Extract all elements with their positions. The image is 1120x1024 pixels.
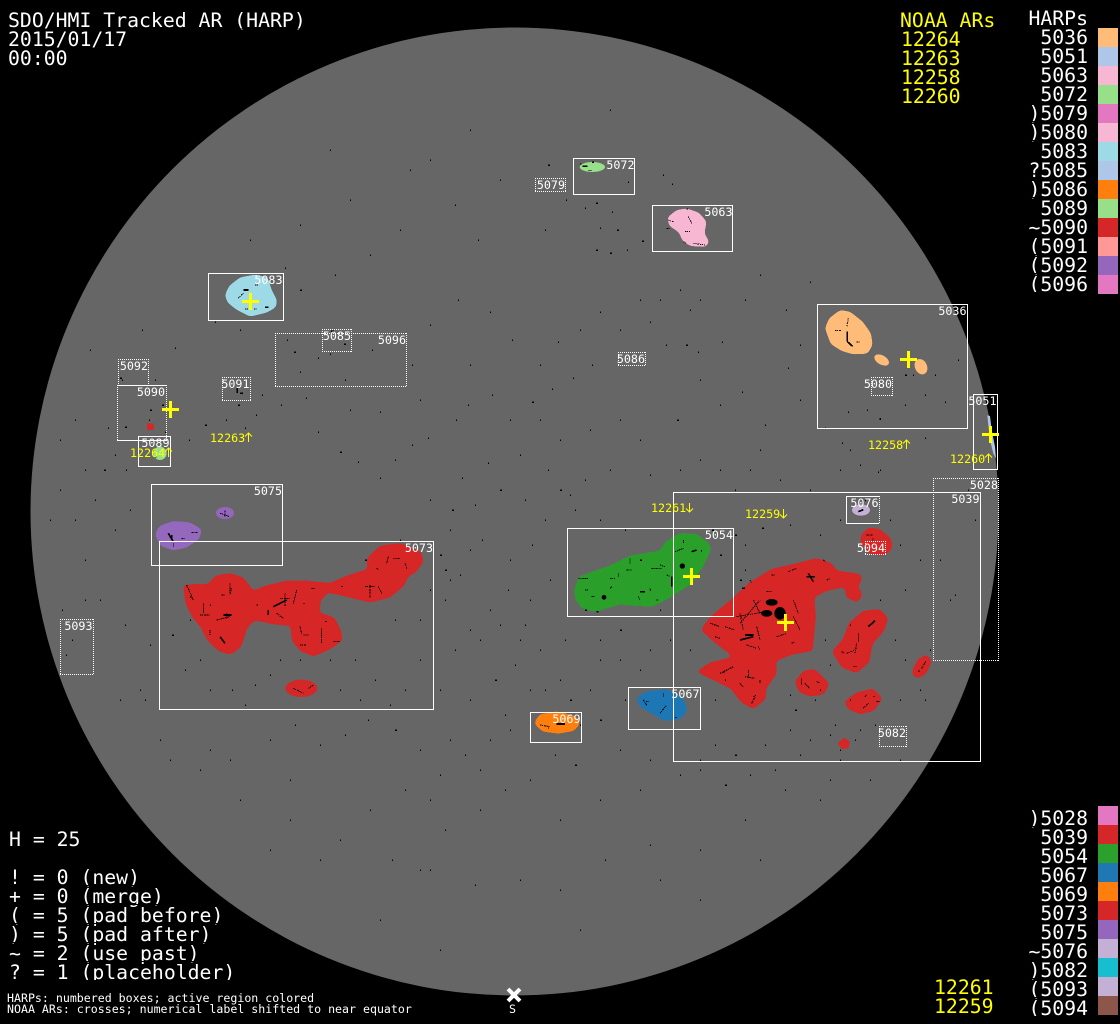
title block: 00:00 (8, 47, 68, 70)
active region: HARP 5054 (574, 533, 711, 612)
HARP list, bottom: 5073 (1040, 902, 1088, 925)
HARP 5054 box and label (568, 528, 734, 616)
active region: HARP 5089 (153, 447, 167, 460)
H count and status legend: ~ = 2 (use past) (9, 942, 200, 965)
HARP list, top: 5051 (1040, 45, 1088, 68)
HARP 5036 box and label: 5036 (938, 304, 966, 318)
H count and status legend: ! = 0 (new) (9, 866, 140, 889)
HARP 5073 box and label: 5073 (405, 541, 433, 555)
HARP list, bottom: 5039 (1040, 826, 1088, 849)
HARP 5072 box and label (574, 158, 634, 194)
NOAA label 12261: 12261 (651, 501, 686, 515)
title block (9, 12, 302, 66)
HARP list, bottom: )5028 (1028, 807, 1088, 830)
HARP list, bottom: 5054 (1040, 845, 1088, 868)
NOAA label 12260: 12260 (950, 452, 985, 466)
active region: HARP 5075 (155, 507, 234, 550)
HARP 5051 box and label (968, 394, 998, 470)
HARP 5083 box and label (208, 273, 284, 320)
NOAA AR list, bottom: 12261 (934, 976, 994, 999)
HARP list, top: 5036 (1040, 26, 1088, 49)
footnote (7, 991, 412, 1016)
H count and status legend: H = 25 (9, 828, 80, 851)
footnote: NOAA ARs: crosses; numerical label shifted to near equator (7, 1002, 412, 1016)
HARP list, top: ?5085 (1028, 159, 1088, 182)
HARP list, top: 5072 (1040, 83, 1088, 106)
HARP 5054 box and label: 5054 (705, 528, 733, 542)
HARP 5067 box and label: 5067 (671, 687, 700, 701)
HARP 5028 dotted box and label: 5028 (970, 478, 998, 492)
NOAA AR list, top: 12263 (901, 47, 961, 70)
south label: S (509, 1002, 516, 1016)
HARP 5080 dotted box and label: 5080 (864, 377, 892, 391)
HARP list, top: HARPs (1028, 7, 1088, 30)
HARP 5067 box and label (628, 687, 700, 730)
colour swatches, top (1098, 28, 1118, 294)
HARP 5096 dotted box and label (275, 333, 407, 387)
HARP list, bottom: (5093 (1028, 978, 1088, 1001)
HARP 5090 box and label (117, 385, 167, 441)
H count and status legend: ( = 5 (pad before) (9, 904, 223, 927)
HARP 5090 box and label: 5090 (137, 385, 165, 399)
south pole marker (508, 989, 520, 1001)
sunspots and magnetic specks (50, 110, 976, 950)
HARP list, top: 5063 (1040, 64, 1088, 87)
title block: SDO/HMI Tracked AR (HARP) (8, 9, 306, 32)
NOAA AR list, top: NOAA ARs (900, 9, 995, 32)
HARP 5076 box and label (846, 496, 880, 524)
NOAA AR list, top: 12264 (901, 28, 961, 51)
active region: HARP 5036 (825, 310, 930, 376)
HARP list, top: 5089 (1040, 197, 1088, 220)
NOAA AR list, bottom: 12259 (934, 995, 994, 1018)
HARP 5086 dotted box and label: 5086 (617, 352, 645, 366)
active region: HARP 5076 (852, 504, 870, 516)
HARP 5072 box and label: 5072 (606, 158, 634, 172)
HARP list, bottom (1028, 807, 1088, 1020)
NOAA label 12263: 12263 (210, 431, 245, 445)
HARP 5069 box and label (530, 712, 582, 742)
active region: HARP 5072 (580, 162, 605, 172)
NOAA label 12258: 12258 (868, 438, 903, 452)
HARP 5096 dotted box and label: 5096 (378, 333, 406, 347)
HARP 5091 dotted box and label: 5091 (221, 377, 250, 391)
HARP list, bottom: 5075 (1040, 921, 1088, 944)
HARP list, bottom: (5094 (1028, 997, 1088, 1020)
NOAA AR list, top: 12258 (901, 66, 961, 89)
HARP 5075 box and label (152, 484, 282, 566)
active region: HARP 5083 (225, 275, 277, 317)
active region: HARP 5063 (667, 208, 709, 247)
HARP 5089 box and label (138, 436, 170, 466)
HARP list, top (1028, 7, 1088, 296)
H count and status legend: ? = 1 (placeholder) (9, 961, 235, 984)
HARP 5093 dotted box and label: 5093 (64, 619, 92, 633)
HARP list, bottom: 5067 (1040, 864, 1088, 887)
H count and status legend: + = 0 (merge) (9, 885, 164, 908)
NOAA AR list, top (900, 9, 995, 108)
HARP 5085 dotted box and label (322, 329, 352, 352)
NOAA AR list, bottom (934, 976, 994, 1018)
NOAA AR list, top: 12260 (901, 85, 961, 108)
H count and status legend: ) = 5 (pad after) (9, 923, 211, 946)
HARP 5076 box and label: 5076 (850, 496, 878, 510)
HARP list, top: ~5090 (1028, 216, 1088, 239)
HARP list, bottom: 5069 (1040, 883, 1088, 906)
H count and status legend (9, 828, 235, 984)
HARP 5075 box and label: 5075 (254, 484, 282, 498)
HARP list, bottom: )5082 (1028, 959, 1088, 982)
HARP 5093 dotted box and label (60, 619, 94, 675)
HARP 5063 box and label: 5063 (704, 205, 732, 219)
HARP 5094 dotted box and label: 5094 (857, 541, 885, 555)
HARP 5051 box and label: 5051 (968, 394, 996, 408)
active region: HARP 5090 (147, 423, 154, 430)
HARP list, top: )5079 (1028, 102, 1088, 125)
HARP 5092 dotted box and label: 5092 (120, 359, 148, 373)
HARP list, bottom: ~5076 (1028, 940, 1088, 963)
HARP 5036 box and label (818, 304, 968, 428)
HARP 5083 box and label: 5083 (254, 273, 282, 287)
NOAA label 12264: 12264 (130, 446, 165, 460)
HARP 5082 dotted box and label (878, 726, 907, 747)
active region: HARP 5069 (534, 711, 580, 734)
active region: HARP 5067 (636, 689, 688, 721)
active region: HARP 5073 (183, 543, 424, 697)
title block: 2015/01/17 (8, 28, 127, 51)
HARP 5028 dotted box and label (933, 478, 999, 661)
HARP 5089 box and label: 5089 (141, 436, 170, 450)
NOAA label 12259: 12259 (745, 507, 780, 521)
NOAA crosses (162, 293, 999, 631)
HARP 5092 dotted box and label (118, 359, 149, 385)
colour swatches, bottom (1098, 806, 1118, 1015)
HARP list, top: (5091 (1028, 235, 1088, 258)
footnote: HARPs: numbered boxes; active region colored (7, 991, 314, 1005)
active region: HARP 5051 (987, 415, 996, 458)
HARP 5069 box and label: 5069 (552, 712, 580, 726)
HARP list, top: (5092 (1028, 254, 1088, 277)
HARP list, top: )5086 (1028, 178, 1088, 201)
HARP 5039 box and label: 5039 (951, 492, 980, 506)
HARP list, top: )5080 (1028, 121, 1088, 144)
HARP 5073 box and label (160, 541, 434, 710)
HARP 5082 dotted box and label: 5082 (878, 726, 906, 740)
HARP list, top: 5083 (1040, 140, 1088, 163)
HARP 5039 box and label (674, 492, 980, 762)
HARP list, top: (5096 (1028, 273, 1088, 296)
HARP 5091 dotted box and label (221, 377, 251, 401)
HARP 5063 box and label (652, 205, 732, 252)
HARP 5085 dotted box and label: 5085 (323, 329, 351, 343)
HARP 5079 dotted box and label: 5079 (537, 178, 565, 192)
active region: HARP 5039 (696, 527, 932, 749)
